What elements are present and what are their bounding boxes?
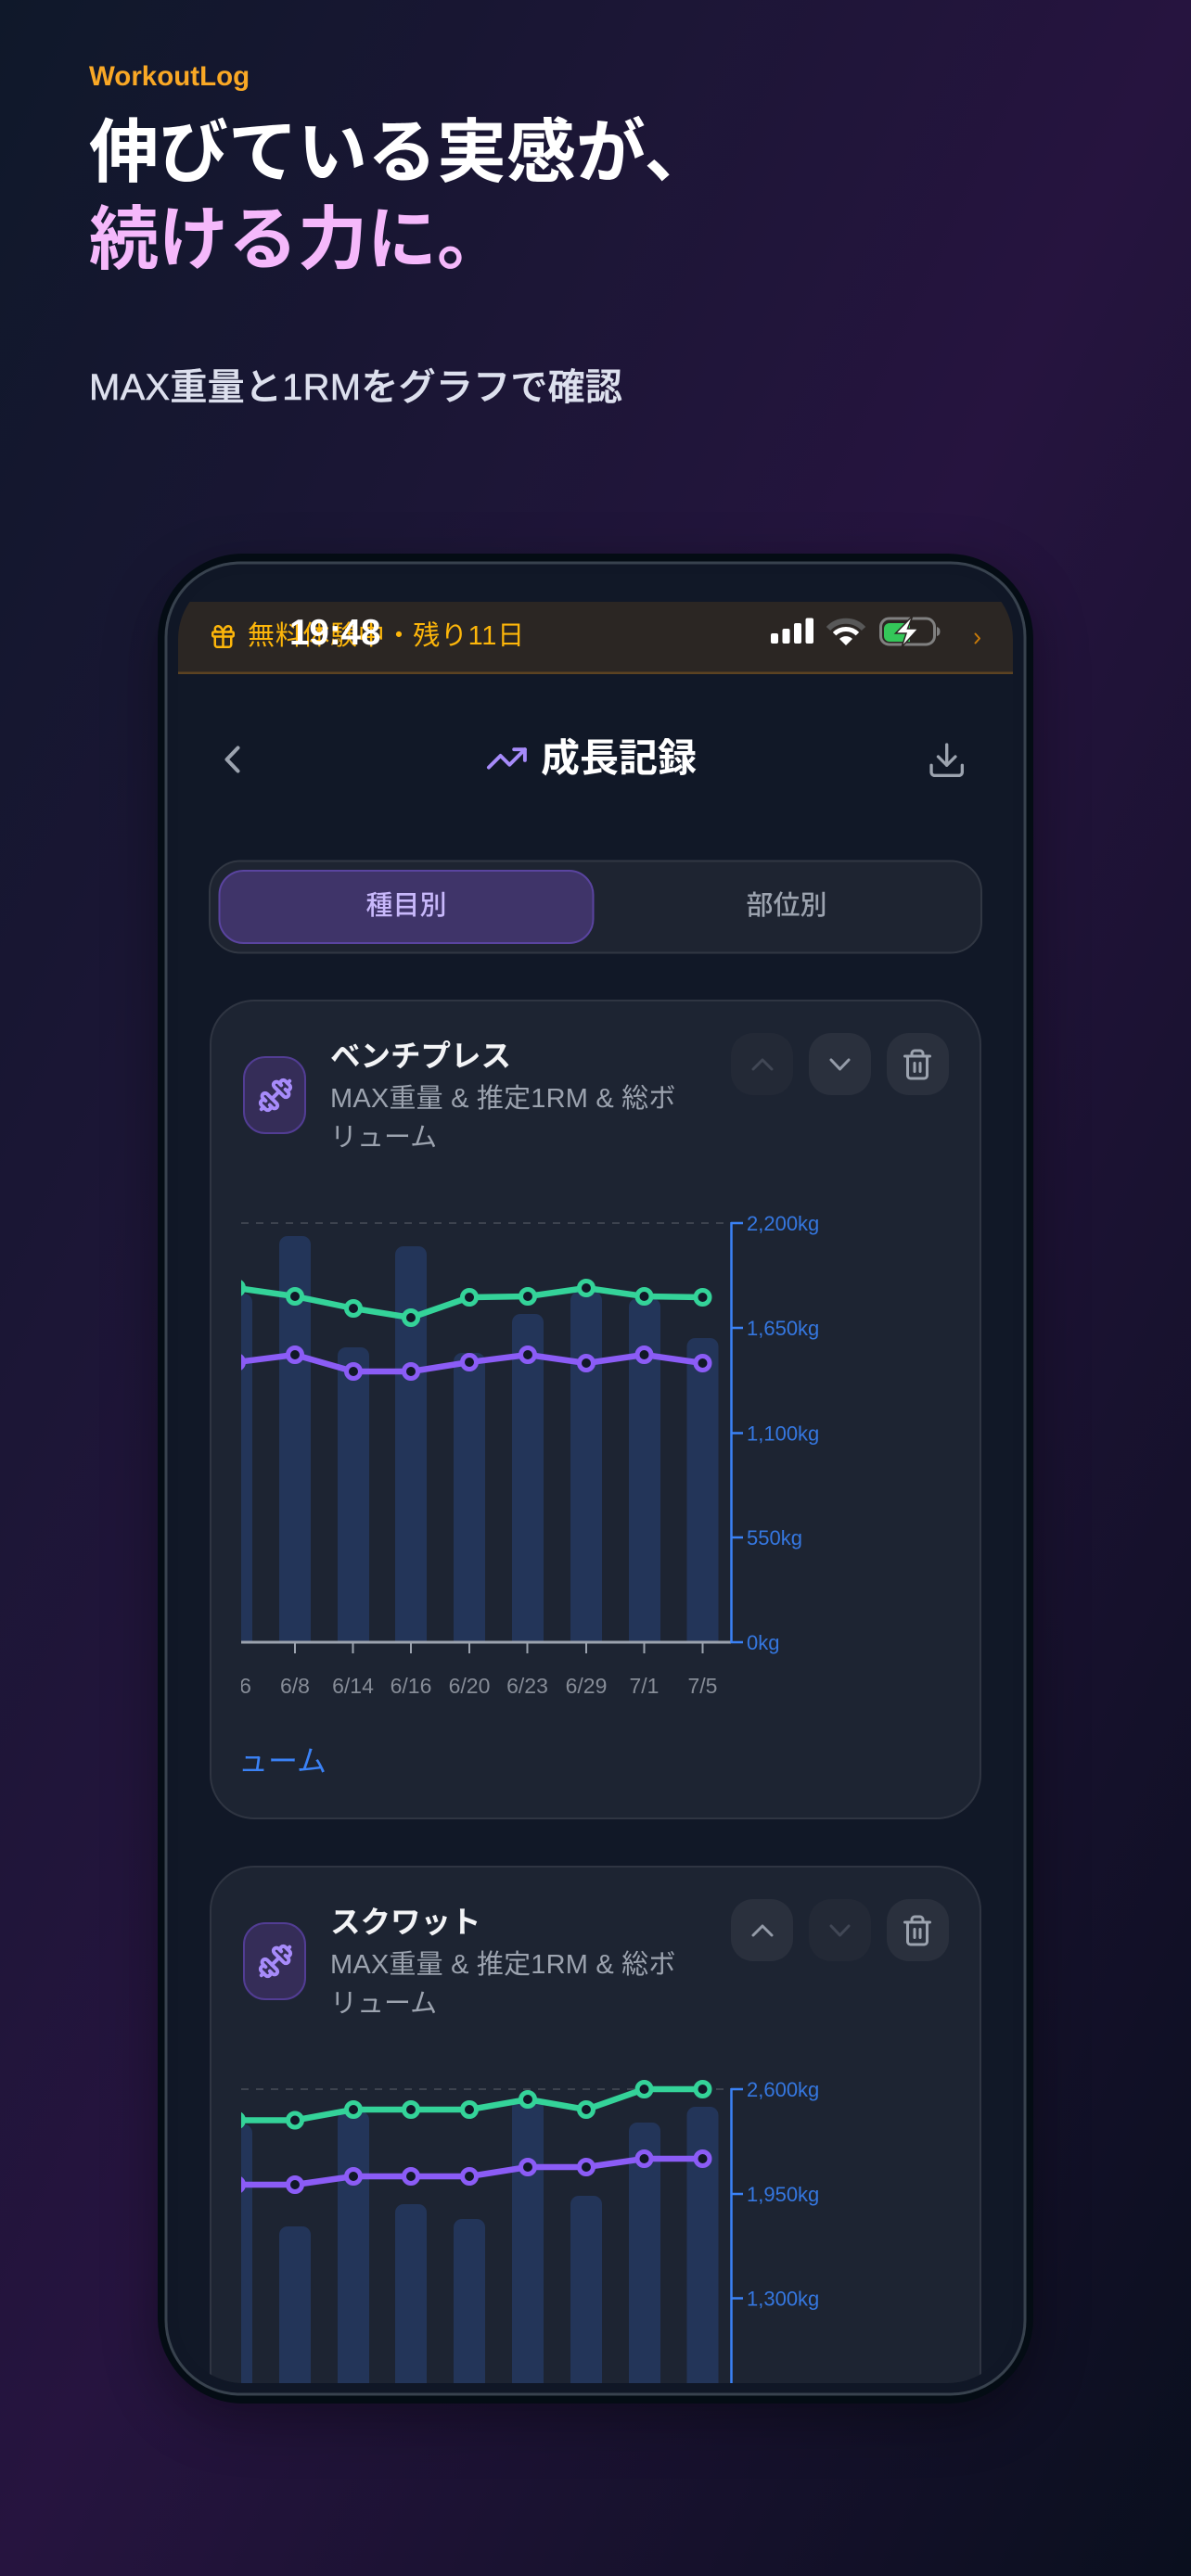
- status bar: [291, 618, 941, 645]
- axis: dates: 6/14: [332, 1674, 374, 1698]
- clock: 19:48: [289, 613, 380, 653]
- line: max weight, estimated 1RM: [230, 1282, 710, 1378]
- brand label: WorkoutLog: [89, 61, 250, 92]
- card description: リューム: [330, 1989, 437, 2019]
- buttons: reorder and delete: [731, 1033, 949, 1095]
- card description: [330, 1949, 676, 2019]
- axis: volume kg: 2,600kg: [747, 2078, 819, 2101]
- inactive tab: 部位別: [746, 890, 827, 921]
- icon: wifi: [828, 621, 864, 645]
- axis: dates: 6/8: [280, 1674, 310, 1698]
- axis: dates: 6/29: [566, 1674, 607, 1698]
- card description: [330, 1083, 676, 1153]
- icon: banner chevron: [976, 634, 980, 644]
- card title: スクワット: [330, 1906, 481, 1939]
- icon: signal: [771, 618, 813, 644]
- card title: ベンチプレス: [330, 1039, 511, 1073]
- axis: volume kg: 2,200kg: [747, 1212, 819, 1235]
- axis: volume kg: 550kg: [747, 1526, 802, 1549]
- icon: battery: [881, 616, 941, 647]
- screen title: 成長記録: [541, 736, 697, 780]
- panel: squat card: [211, 1867, 980, 2576]
- active tab: [219, 871, 594, 943]
- icon: back: [226, 747, 237, 772]
- panel: bench press card: [211, 1001, 980, 1818]
- icon: gift: [212, 626, 234, 647]
- line: max weight, estimated 1RM: [230, 2083, 710, 2192]
- card description: MAX重量 & 推定1RM & 総ボ: [330, 1949, 676, 1980]
- headline: [89, 113, 714, 278]
- icon: dumbbell: [244, 1923, 305, 1999]
- phone screen: [178, 602, 1013, 2383]
- trial banner: [178, 602, 1013, 674]
- axis: dates: 6/20: [449, 1674, 490, 1698]
- axis: volume kg: 1,950kg: [747, 2183, 819, 2206]
- card description: MAX重量 & 推定1RM & 総ボ: [330, 1083, 676, 1114]
- nav bar: [226, 736, 962, 780]
- axis: dates: 7/5: [688, 1674, 717, 1698]
- banner text: 無料体験中・残り11日: [248, 620, 525, 651]
- axis: dates: 6/6: [222, 1674, 251, 1698]
- legend: volume (scrolled): ューム: [238, 1744, 327, 1778]
- icon: download: [931, 745, 962, 775]
- active tab: 種目別: [365, 890, 447, 921]
- bars: volume: [221, 1236, 718, 1641]
- axis: dates: 7/1: [630, 1674, 659, 1698]
- axis: volume kg: [731, 1212, 819, 1654]
- chart: bench press: [221, 1212, 819, 1698]
- headline: 続ける力に。: [89, 200, 506, 278]
- icon: dumbbell: [244, 1057, 305, 1133]
- axis: volume kg: 1,300kg: [747, 2287, 819, 2311]
- bars: volume: [221, 2099, 718, 2429]
- axis: dates: 6/23: [506, 1674, 548, 1698]
- axis: volume kg: 1,650kg: [747, 1317, 819, 1340]
- axis: volume kg: [731, 2078, 819, 2429]
- subheading: MAX重量と1RMをグラフで確認: [89, 367, 622, 408]
- headline: 伸びている実感が、: [89, 113, 714, 191]
- phone mockup: [158, 554, 1033, 2576]
- axis: volume kg: 1,100kg: [747, 1422, 819, 1445]
- axis: volume kg: 0kg: [747, 1631, 779, 1654]
- card description: リューム: [330, 1123, 437, 1153]
- chart: squat: [221, 2078, 819, 2429]
- axis: dates: [222, 1642, 731, 1698]
- segmented control: [210, 861, 981, 953]
- icon: trend up: [489, 749, 525, 768]
- axis: dates: 6/16: [391, 1674, 431, 1698]
- buttons: reorder and delete: [731, 1899, 949, 1961]
